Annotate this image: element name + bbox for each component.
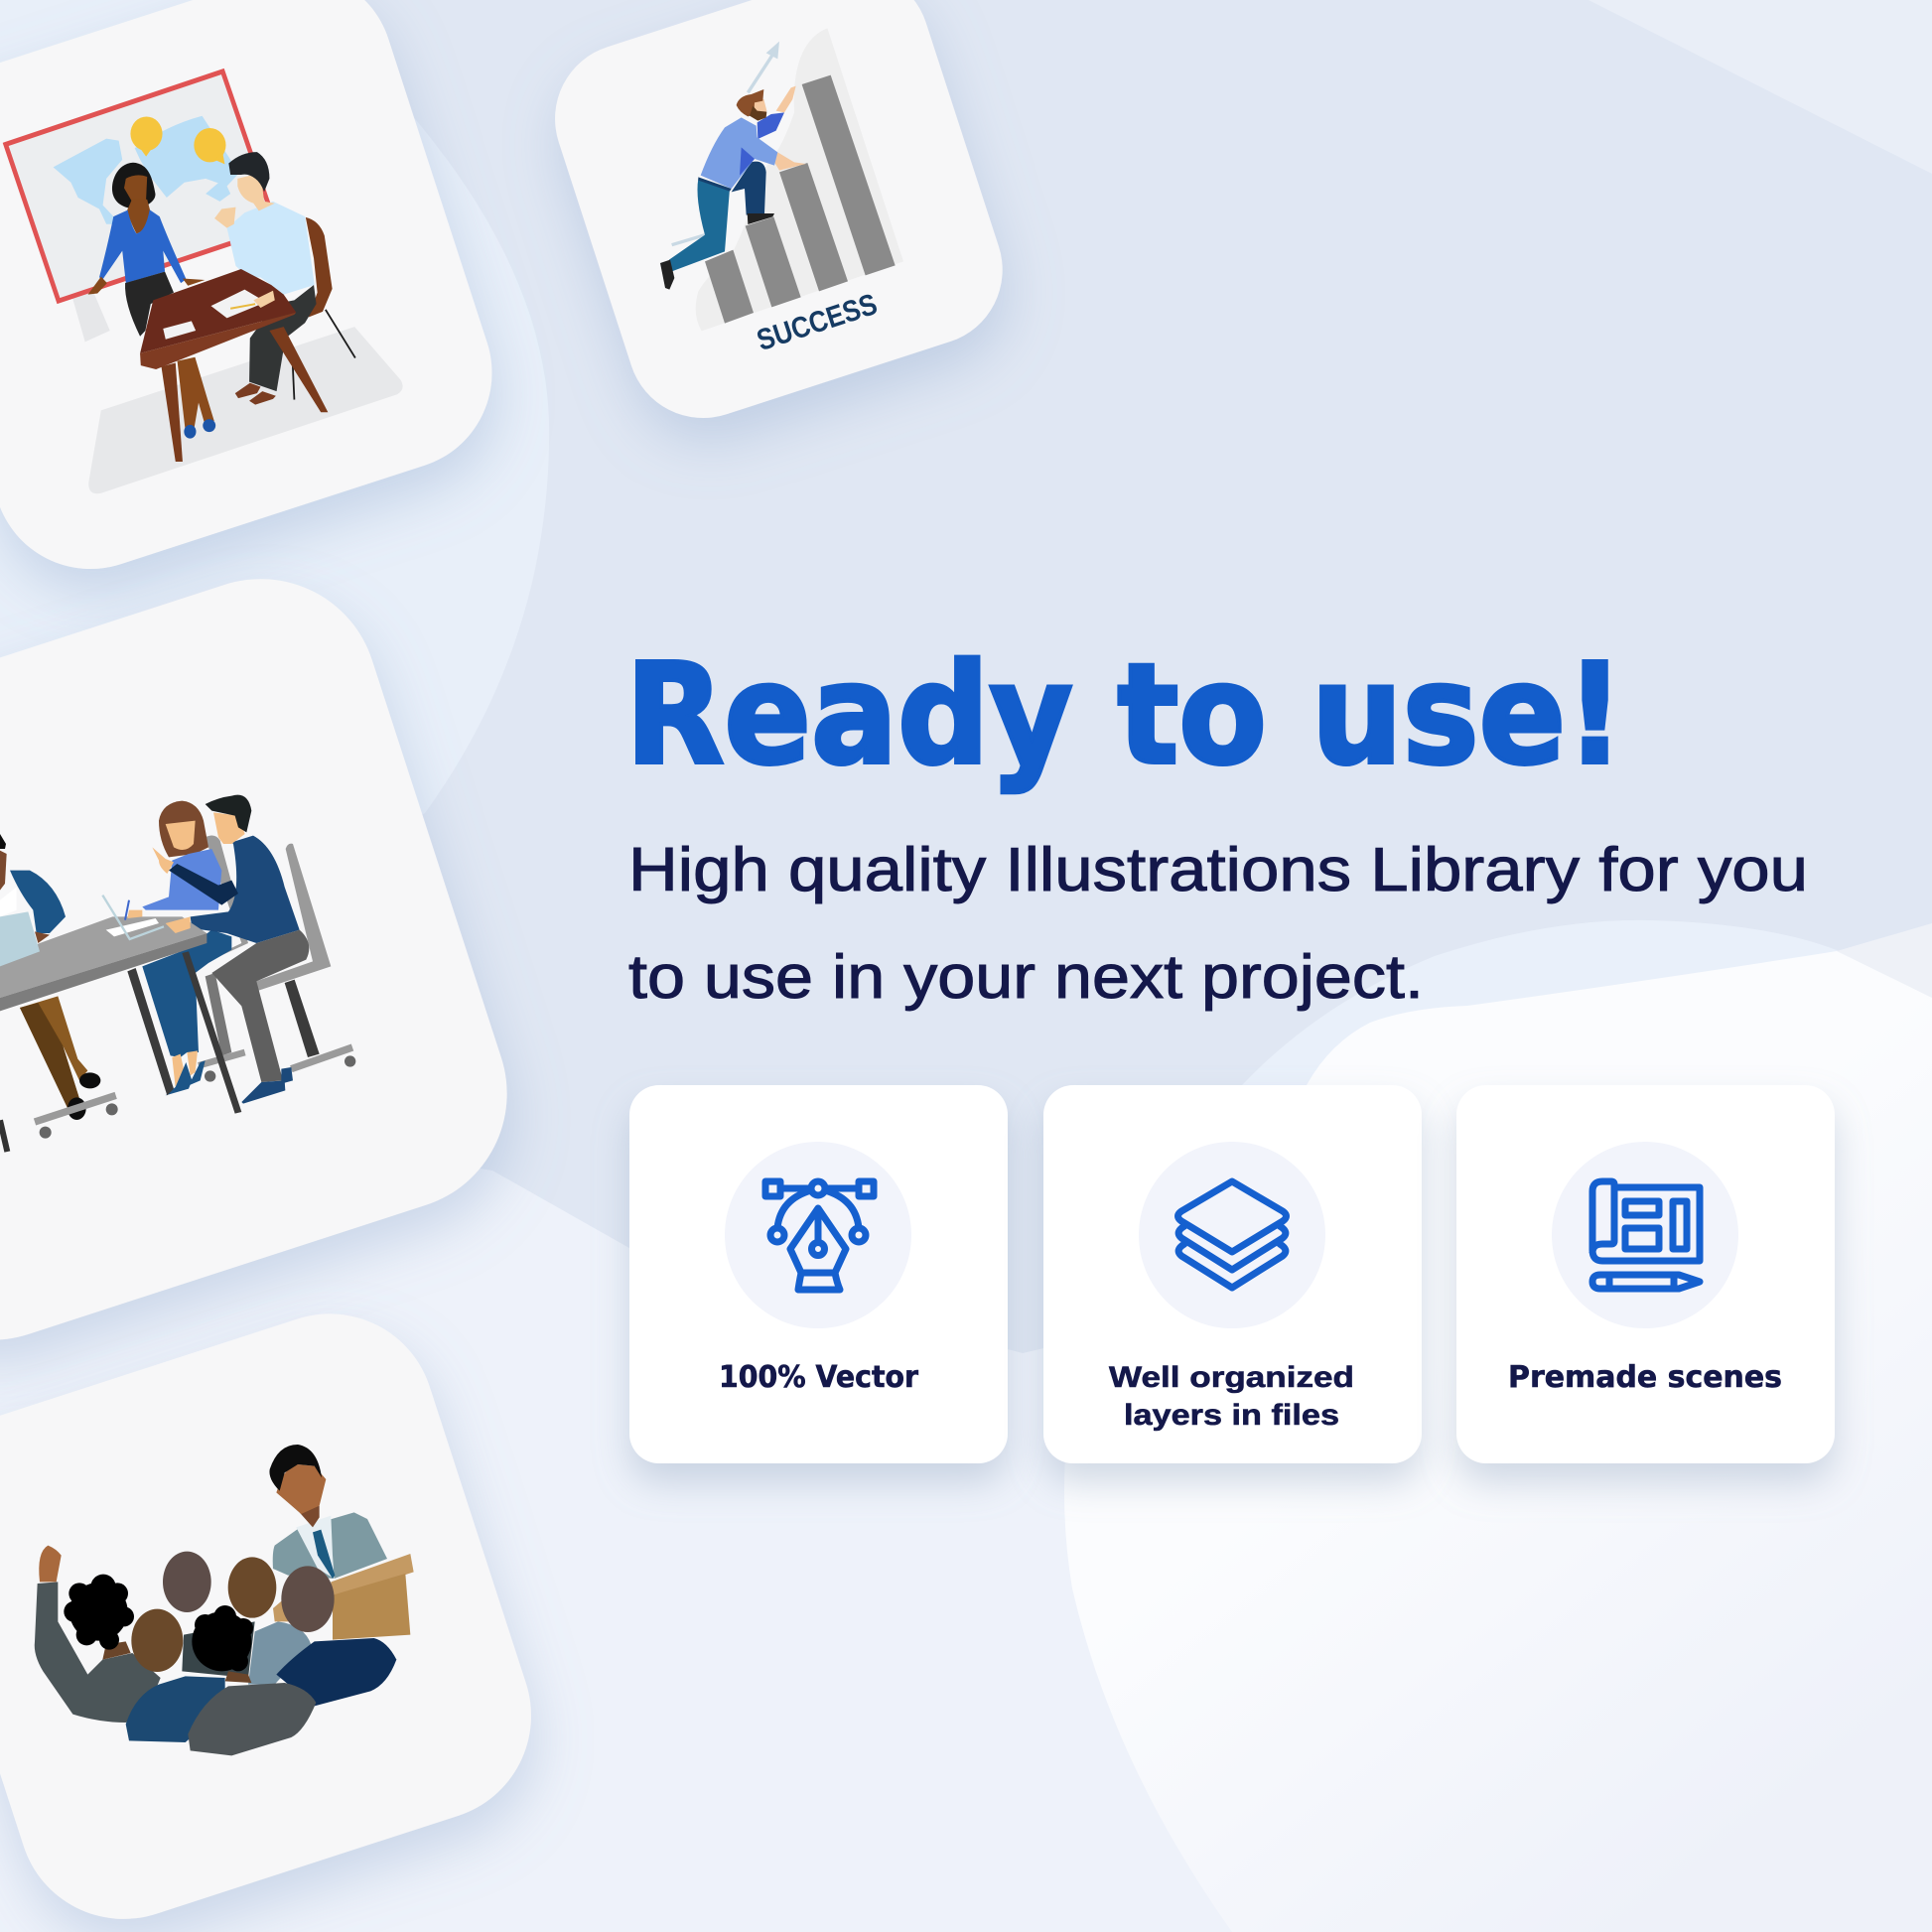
feature card: premade scenes [1456,1085,1835,1463]
illustration: team around a table [0,795,355,1152]
feature card: 100% vector [629,1085,1008,1463]
panel: meeting card [0,0,517,595]
subtitle [628,836,1808,1012]
label: 100% Vector: 100% Vector [719,1360,918,1395]
label: Well organized layers in files [1109,1361,1354,1432]
icon: blueprint and pencil [1592,1181,1700,1289]
label: Premade scenes: Premade scenes [1508,1360,1782,1395]
label: Well organized layers in files: Well organized [1109,1361,1354,1394]
label: SUCCESS: SUCCESS [754,288,882,357]
illustration: man climbing bar chart [660,28,903,331]
title: Ready to use! [625,634,1624,796]
panel: team meeting card [0,549,537,1370]
panel: success card [535,0,1022,438]
feature card: organized layers [1043,1085,1422,1463]
panel: audience card [0,1287,559,1932]
icon: pen tool [765,1181,874,1290]
subtitle: High quality Illustrations Library for you [628,836,1808,904]
icon: layers [1177,1181,1287,1288]
subtitle: to use in your next project. [628,943,1424,1012]
illustration: two people at a desk with world map [6,71,403,493]
illustration: speaker and audience [35,1445,414,1755]
label: Well organized layers in files: layers in files [1124,1399,1339,1432]
